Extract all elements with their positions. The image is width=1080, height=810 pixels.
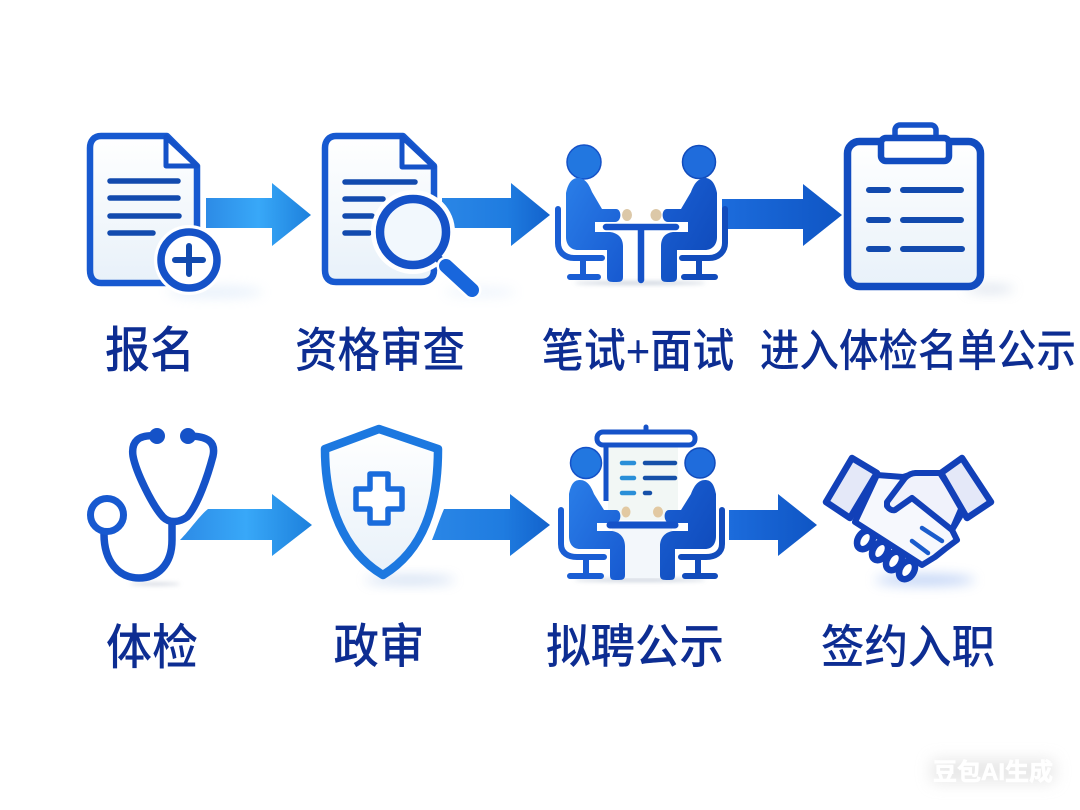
hands — [622, 209, 632, 221]
left chair — [561, 510, 604, 576]
icon: handshake — [826, 458, 991, 582]
clasped hands — [855, 473, 964, 565]
soft ground shadows — [130, 282, 1014, 586]
label: 签约入职: 签约入职 — [821, 622, 995, 673]
arrow: 报名 to 资格审查 — [206, 183, 311, 246]
icon: clipboard — [848, 125, 980, 286]
right person — [661, 146, 717, 282]
right chair — [682, 209, 725, 277]
left cuff — [826, 458, 877, 518]
left person — [569, 448, 625, 580]
board — [608, 446, 678, 520]
icon: shield with cross — [325, 429, 438, 575]
label: 进入体检名单公示: 进入体检名单公示 — [760, 326, 1076, 375]
thumb and upper hand — [887, 473, 962, 530]
arrow: 政审 to 拟聘公示 — [432, 494, 550, 556]
arrow: 资格审查 to 笔试+面试 — [442, 183, 550, 246]
finger bumps — [854, 528, 918, 582]
right cuff — [941, 458, 991, 518]
arrow: 体检 to 政审 — [180, 494, 312, 556]
icon: stethoscope — [90, 428, 214, 578]
arrow: 拟聘公示 to 签约入职 — [729, 494, 817, 556]
icon: interview at table — [558, 145, 725, 282]
icon: document with magnifier — [325, 136, 472, 290]
label: 政审: 政审 — [334, 620, 424, 673]
label: 体检: 体检 — [106, 620, 198, 674]
right chair — [681, 510, 722, 576]
arrow: 笔试+面试 to 进入体检名单公示 — [722, 184, 842, 246]
label: 笔试+面试: 笔试+面试 — [542, 326, 734, 377]
icon: public notice board with two people — [561, 427, 722, 580]
watermark: 豆包AI生成 — [933, 759, 1053, 786]
label: 资格审查: 资格审查 — [295, 324, 465, 378]
right person — [660, 448, 716, 580]
table — [610, 522, 675, 528]
icon: document with plus — [90, 136, 224, 295]
label: 拟聘公示: 拟聘公示 — [546, 620, 724, 673]
left person — [566, 145, 623, 282]
table — [606, 227, 676, 280]
label: 报名: 报名 — [105, 323, 195, 377]
left chair — [558, 209, 602, 277]
hands — [622, 506, 630, 518]
